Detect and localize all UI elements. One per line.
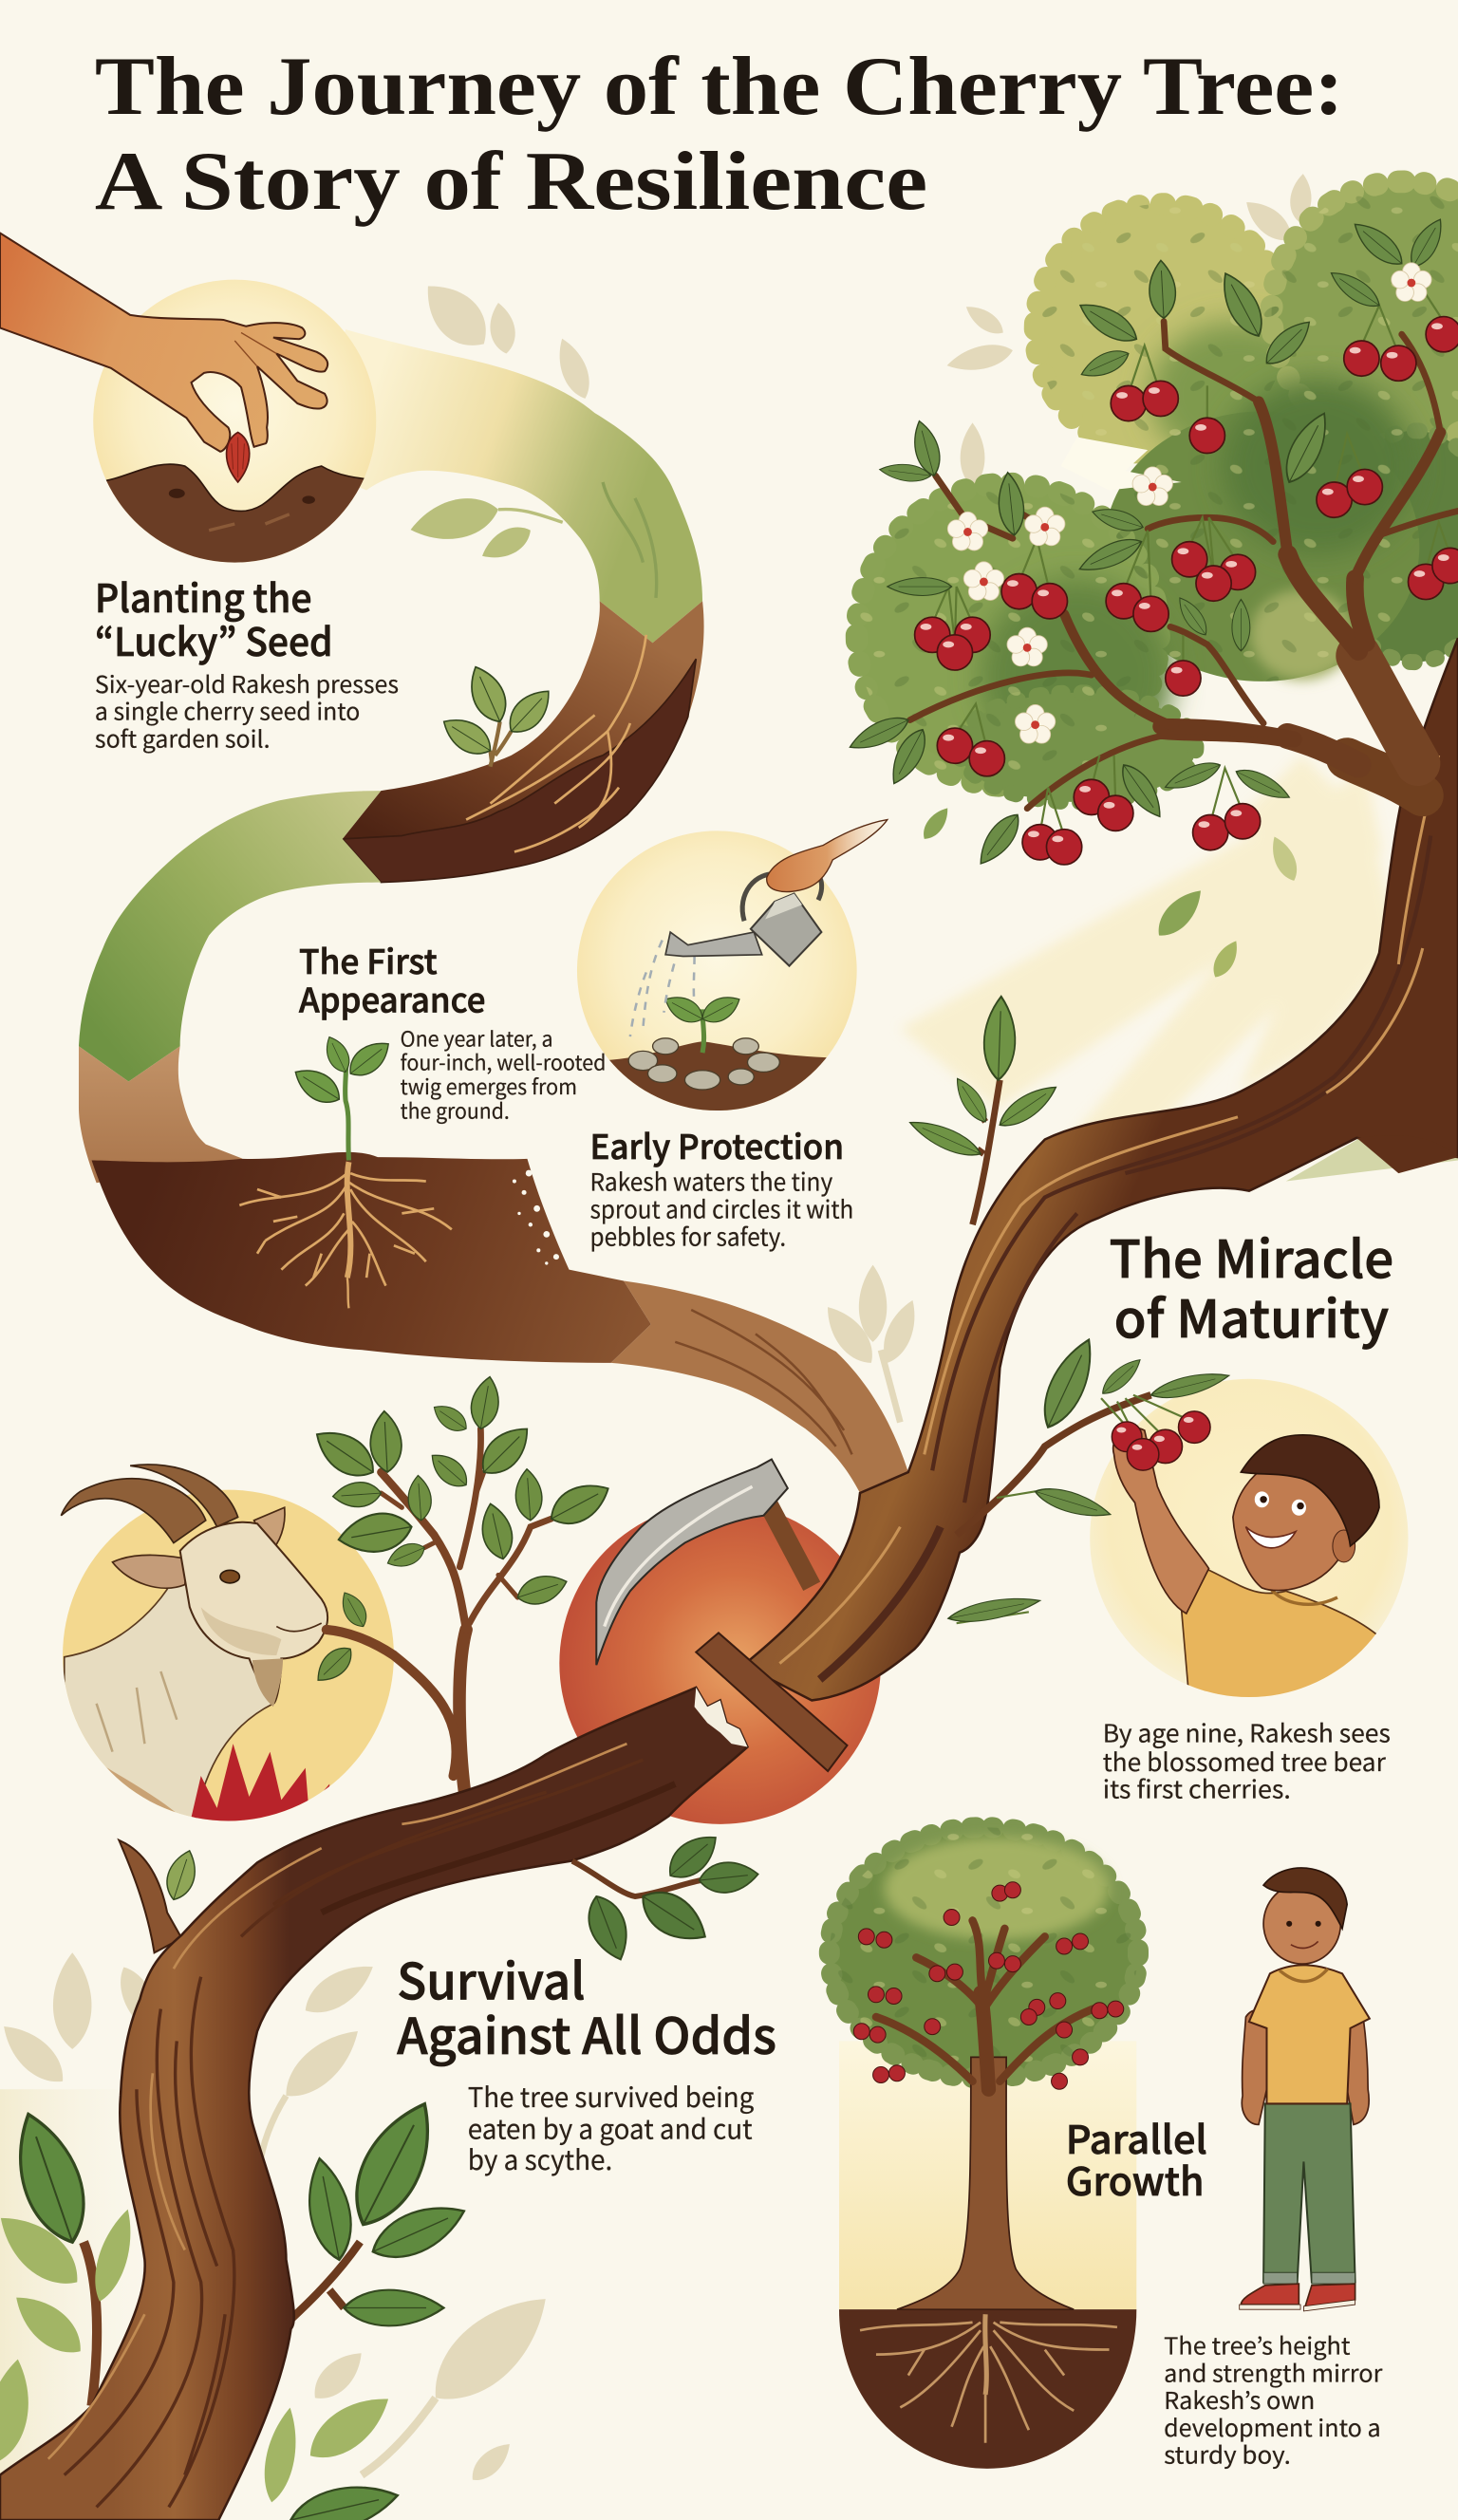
heading: the miracle of maturity: of Maturity <box>1114 1278 1389 1353</box>
panel: early protection watering circle <box>570 820 888 1125</box>
heading and text: early protection: Rakesh waters the tiny <box>590 1165 832 1199</box>
panel: planting the seed circle <box>0 233 385 579</box>
heading and text: the first appearance: twig emerges from <box>401 1071 577 1101</box>
broken wooden handle over the cut <box>696 1633 847 1771</box>
heading and text: planting the lucky seed: Planting the <box>95 568 312 624</box>
ribbon leaves and sprout <box>406 491 563 767</box>
panel: boy picking cherries <box>1090 1379 1409 1704</box>
icon: standing boy <box>1240 1868 1370 2311</box>
icon: water drops <box>630 941 695 1036</box>
ribbon: soil and roots band <box>79 1046 908 1493</box>
text: the miracle of maturity: its first cherries. <box>1103 1770 1291 1806</box>
title: The Journey of the Cherry Tree: <box>95 41 1344 133</box>
text: the miracle of maturity <box>1103 1713 1391 1806</box>
icon: seedling with roots <box>239 1033 452 1308</box>
ribbon: green bend <box>79 791 381 1082</box>
heading and text: parallel growth: sturdy boy. <box>1164 2438 1291 2472</box>
icon: goat-eaten sapling <box>308 1374 616 1803</box>
main lower trunk with broken end <box>0 1688 747 2520</box>
cherry stems <box>932 289 1450 835</box>
heading and text: survival against all odds <box>397 1942 776 2178</box>
cherries on tree <box>915 317 1458 865</box>
heading and text: the first appearance <box>299 936 606 1125</box>
heading and text: parallel growth: Growth <box>1066 2151 1204 2207</box>
blossoms <box>947 263 1431 743</box>
heading and text: parallel growth: development into a <box>1164 2411 1381 2444</box>
panel: parallel growth tree <box>830 1827 1138 2469</box>
heading and text: early protection: pebbles for safety. <box>590 1219 786 1253</box>
heading and text: early protection <box>590 1121 853 1253</box>
heading and text: the first appearance: One year later, a <box>401 1022 553 1053</box>
icon: watering can and hand <box>665 820 888 966</box>
heading and text: planting the lucky seed: a single cherry seed into <box>95 695 360 728</box>
title: A Story of Resilience <box>95 136 927 228</box>
leaves at lower left <box>0 1847 472 2520</box>
heading and text: parallel growth <box>1066 2109 1383 2472</box>
heading and text: survival against all odds: by a scythe. <box>468 2139 612 2178</box>
text: the miracle of maturity: the blossomed tree bear <box>1103 1743 1387 1779</box>
icon: goat head <box>61 1465 327 1707</box>
icon: boy head <box>1233 1435 1379 1591</box>
panel: red circle with scythe <box>559 1459 881 1824</box>
heading and text: planting the lucky seed: “Lucky” Seed <box>95 611 333 667</box>
heading and text: survival against all odds: eaten by a goat and cut <box>468 2109 753 2148</box>
branch and cherries above boy <box>946 1333 1231 1627</box>
big tree trunk and limbs <box>747 322 1458 1700</box>
heading and text: the first appearance: Appearance <box>299 975 485 1023</box>
heading and text: the first appearance: the ground. <box>401 1094 510 1125</box>
title <box>95 41 1344 228</box>
panel: sun rays behind tree <box>900 756 1398 1149</box>
icon: scythe <box>596 1459 812 1665</box>
heading and text: early protection: sprout and circles it with <box>590 1191 853 1225</box>
heading and text: the first appearance: four-inch, well-rooted <box>401 1047 606 1077</box>
heading and text: parallel growth: The tree’s height <box>1164 2329 1351 2362</box>
icon: raised arm <box>1113 1428 1209 1614</box>
heading and text: planting the lucky seed: Six-year-old Rakesh presses <box>95 667 399 700</box>
panel: cherry tree crown <box>857 181 1458 802</box>
heading and text: parallel growth: and strength mirror <box>1164 2356 1383 2389</box>
heading: the miracle of maturity <box>1110 1218 1393 1353</box>
upper twig with leaves <box>907 996 1062 1224</box>
heading and text: survival against all odds: Against All Odds <box>397 1997 776 2069</box>
heading and text: planting the lucky seed: soft garden soil. <box>95 721 271 755</box>
heading and text: parallel growth: Parallel <box>1066 2109 1207 2165</box>
heading: the miracle of maturity: The Miracle <box>1110 1218 1393 1293</box>
icon: pebbles <box>628 1038 779 1090</box>
leaves on tree <box>846 215 1449 870</box>
heading and text: survival against all odds: Survival <box>397 1942 585 2014</box>
heading and text: planting the lucky seed <box>95 568 399 755</box>
heading and text: survival against all odds: The tree survived being <box>468 2077 754 2116</box>
falling leaves <box>918 803 1303 981</box>
icon: hand holding seed <box>0 233 327 482</box>
heading and text: parallel growth: Rakesh’s own <box>1164 2383 1315 2417</box>
branch with leaves under trunk <box>572 1826 759 1966</box>
text: the miracle of maturity: By age nine, Rakesh sees <box>1103 1713 1391 1749</box>
panel: goat circle <box>61 1465 394 1832</box>
ribbon: planting to roots <box>306 329 704 883</box>
heading and text: the first appearance: The First <box>299 936 438 984</box>
heading and text: early protection: Early Protection <box>590 1121 844 1169</box>
